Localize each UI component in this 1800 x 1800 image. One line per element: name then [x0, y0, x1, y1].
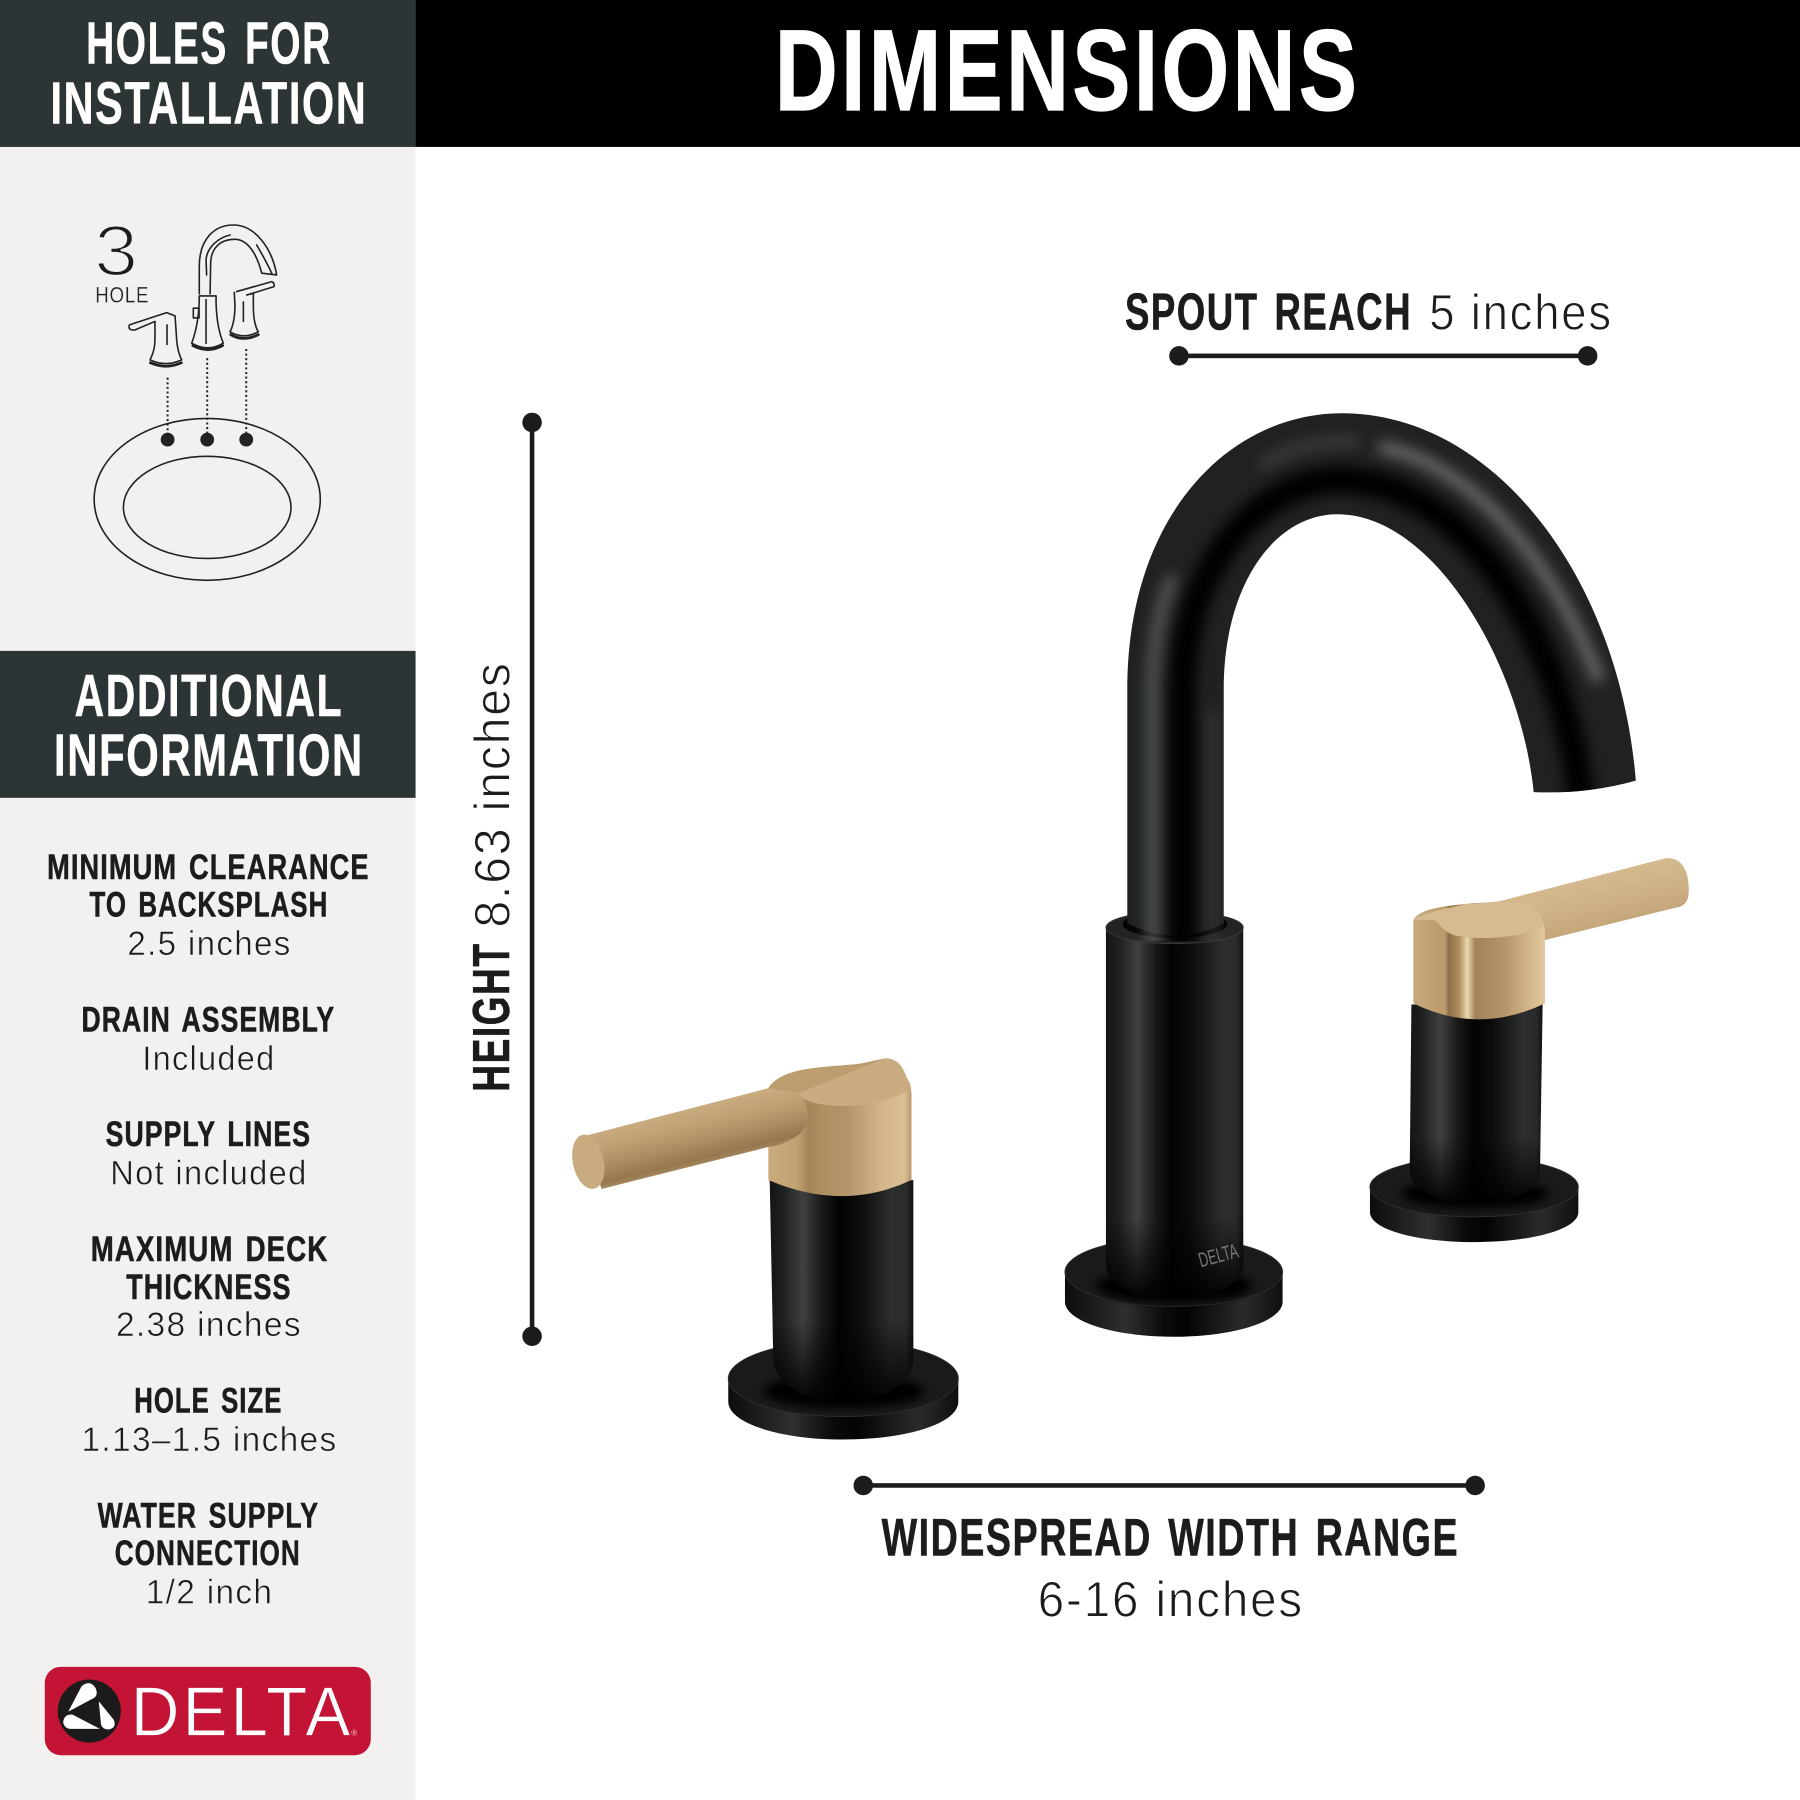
dimension: widespread width range: 6-16 inches — [1038, 1570, 1304, 1627]
spec: drain assembly — [82, 999, 335, 1078]
spec: hole size: 1.13–1.5 inches — [82, 1421, 338, 1459]
spec: supply lines: Not included — [110, 1155, 308, 1193]
faucet: center spout — [1065, 413, 1636, 1337]
spec: minimum clearance — [47, 847, 370, 963]
base disc — [728, 1341, 958, 1440]
lever — [1498, 858, 1689, 940]
spec: hole size — [82, 1381, 338, 1459]
cap shoulder — [768, 1058, 910, 1093]
heading bar: additional information — [0, 651, 416, 798]
base disc — [1370, 1157, 1578, 1242]
logo: Delta: DELTA — [131, 1673, 354, 1751]
dimension: height: 8.63 inches — [464, 661, 521, 928]
icon: 3 hole faucet and sink diagram: 3 — [94, 213, 141, 292]
body — [770, 1180, 913, 1402]
spec: minimum clearance: MINIMUM CLEARANCE — [47, 847, 370, 887]
spec: supply lines: SUPPLY LINES — [106, 1114, 311, 1154]
logo: Delta — [45, 1667, 371, 1755]
dimension: height — [462, 413, 542, 1346]
base disc — [1065, 1238, 1283, 1337]
dimension: spout reach: SPOUT REACH — [1125, 282, 1412, 340]
spec: minimum clearance: 2.5 inches — [127, 925, 292, 963]
spec: maximum deck thickness: 2.38 inches — [116, 1306, 302, 1344]
spec: supply lines — [106, 1114, 311, 1193]
cap top face — [1413, 902, 1543, 938]
heading bar: holes for installation: INSTALLATION — [51, 69, 367, 136]
spec: maximum deck thickness — [91, 1229, 328, 1344]
heading bar: additional information: INFORMATION — [54, 721, 364, 788]
title bar: dimensions — [416, 0, 1800, 147]
logo: Delta: ® — [351, 1729, 358, 1738]
lever — [567, 1088, 808, 1192]
body — [1410, 1004, 1543, 1203]
spec: minimum clearance: TO BACKSPLASH — [90, 885, 328, 925]
dimension: spout reach: 5 inches — [1429, 283, 1613, 340]
panel: left sidebar — [0, 0, 416, 1800]
dimension: widespread width range: WIDESPREAD WIDTH RANGE — [882, 1508, 1459, 1567]
engraved brand mark: DELTA — [1196, 1240, 1241, 1272]
heading bar: holes for installation: HOLES FOR — [86, 10, 332, 77]
title bar: dimensions: DIMENSIONS — [775, 7, 1360, 135]
spec: drain assembly: Included — [142, 1040, 276, 1078]
spec: hole size: HOLE SIZE — [134, 1381, 282, 1421]
spout tube — [1127, 413, 1636, 953]
spec: water supply connection: WATER SUPPLY — [98, 1495, 319, 1535]
spec: water supply connection — [98, 1495, 319, 1612]
spec: maximum deck thickness: MAXIMUM DECK — [91, 1229, 328, 1269]
dimension: height: HEIGHT — [462, 942, 520, 1092]
gold cap — [768, 1058, 911, 1196]
icon: 3 hole faucet and sink diagram — [94, 213, 320, 580]
spec: maximum deck thickness: THICKNESS — [126, 1267, 292, 1307]
body — [1106, 910, 1243, 1299]
cap top face — [798, 1058, 911, 1106]
faucet: left handle — [567, 1058, 958, 1440]
dimension: spout reach — [1125, 282, 1613, 366]
spec: drain assembly: DRAIN ASSEMBLY — [82, 999, 335, 1039]
gold cap — [1413, 902, 1545, 1019]
spec: water supply connection: 1/2 inch — [146, 1574, 273, 1612]
spec: water supply connection: CONNECTION — [115, 1533, 301, 1573]
icon: 3 hole faucet and sink diagram: HOLE — [95, 282, 149, 307]
heading bar: additional information: ADDITIONAL — [75, 662, 343, 729]
dimension: widespread width range — [854, 1476, 1485, 1627]
faucet: right handle — [1370, 858, 1689, 1242]
heading bar: holes for installation — [0, 0, 416, 147]
